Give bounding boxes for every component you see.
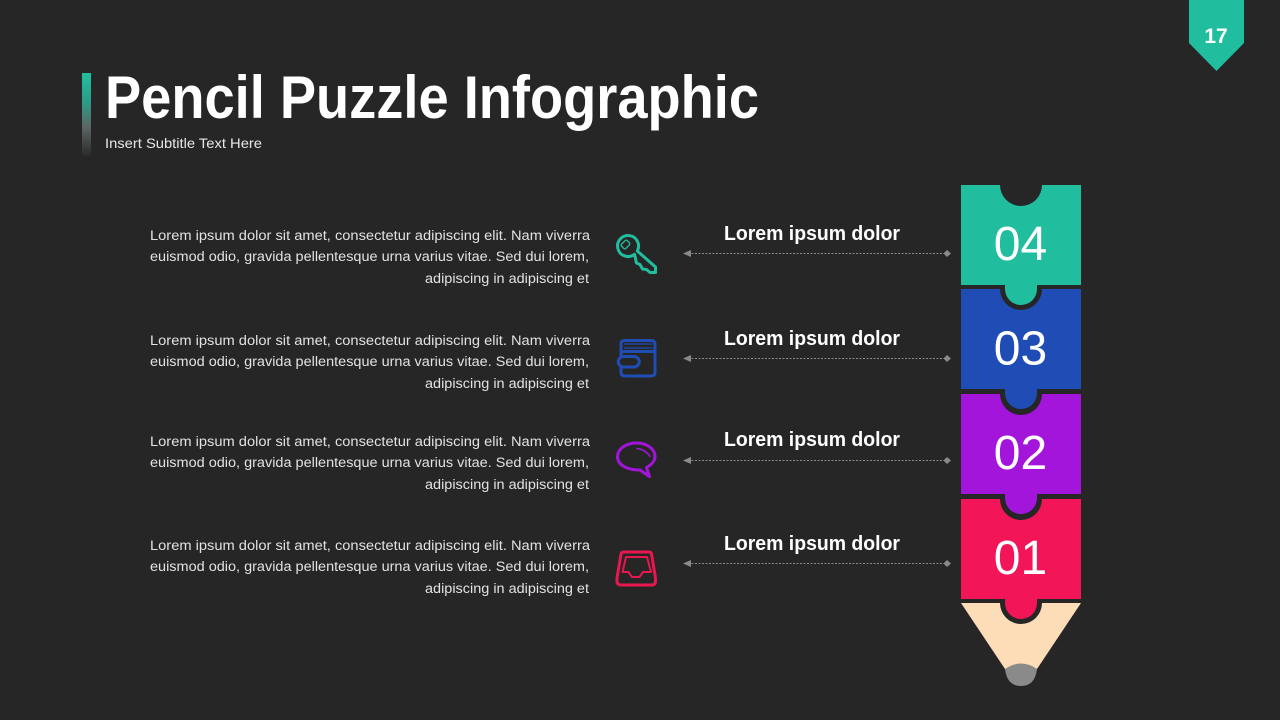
text block: row 03: adipiscing in adipiscing et (425, 376, 589, 391)
text block: row 03: Lorem ipsum dolor sit amet, consectetur adipiscing elit. Nam viverra (150, 333, 591, 348)
puzzle piece 03: 03 (994, 322, 1047, 376)
text block: row 02 (150, 434, 591, 492)
puzzle piece 04 (961, 185, 1081, 305)
text block: row 04: euismod odio, gravida pellentesque urna varius vitae. Sed dui lorem, (150, 249, 589, 264)
text block: row 01 (150, 538, 591, 596)
text block: row 02: adipiscing in adipiscing et (425, 477, 589, 492)
icon: key (618, 236, 656, 272)
pencil tip (961, 603, 1081, 686)
heading: row 02: Lorem ipsum dolor (724, 429, 900, 451)
puzzle piece 04: 04 (994, 218, 1047, 271)
heading: row 03: Lorem ipsum dolor (724, 328, 900, 350)
text block: row 03 (150, 333, 591, 391)
puzzle piece 01: 01 (994, 532, 1047, 585)
text block: row 04: Lorem ipsum dolor sit amet, consectetur adipiscing elit. Nam viverra (150, 228, 591, 243)
heading: row 01: Lorem ipsum dolor (724, 533, 900, 555)
title: Pencil Puzzle Infographic (105, 64, 759, 131)
icon: wallet (618, 340, 655, 376)
arrow: row 02 (683, 457, 951, 464)
heading: row 04: Lorem ipsum dolor (724, 223, 900, 245)
text block: row 01: adipiscing in adipiscing et (425, 581, 589, 596)
puzzle piece 02: 02 (994, 427, 1047, 480)
pencil graphite (1005, 664, 1037, 686)
text block: row 04 (150, 228, 591, 286)
puzzle piece 02 (961, 394, 1081, 514)
text block: row 02: Lorem ipsum dolor sit amet, consectetur adipiscing elit. Nam viverra (150, 434, 591, 449)
icon: inbox tray (617, 552, 656, 585)
arrow: row 01 (683, 560, 951, 567)
arrow: row 04 (683, 250, 951, 257)
page number badge: 17 (1204, 25, 1228, 48)
text block: row 04: adipiscing in adipiscing et (425, 271, 589, 286)
puzzle piece 03 (961, 289, 1081, 409)
subtitle: Insert Subtitle Text Here (105, 135, 262, 151)
icon: speech bubble (618, 443, 655, 476)
page number badge (1189, 0, 1244, 71)
text block: row 01: euismod odio, gravida pellentesque urna varius vitae. Sed dui lorem, (150, 559, 589, 574)
puzzle piece 01 (961, 499, 1081, 619)
text block: row 02: euismod odio, gravida pellentesque urna varius vitae. Sed dui lorem, (150, 455, 589, 470)
text block: row 03: euismod odio, gravida pellentesque urna varius vitae. Sed dui lorem, (150, 354, 589, 369)
arrow: row 03 (683, 355, 951, 362)
title accent bar (82, 73, 91, 156)
text block: row 01: Lorem ipsum dolor sit amet, consectetur adipiscing elit. Nam viverra (150, 538, 591, 553)
